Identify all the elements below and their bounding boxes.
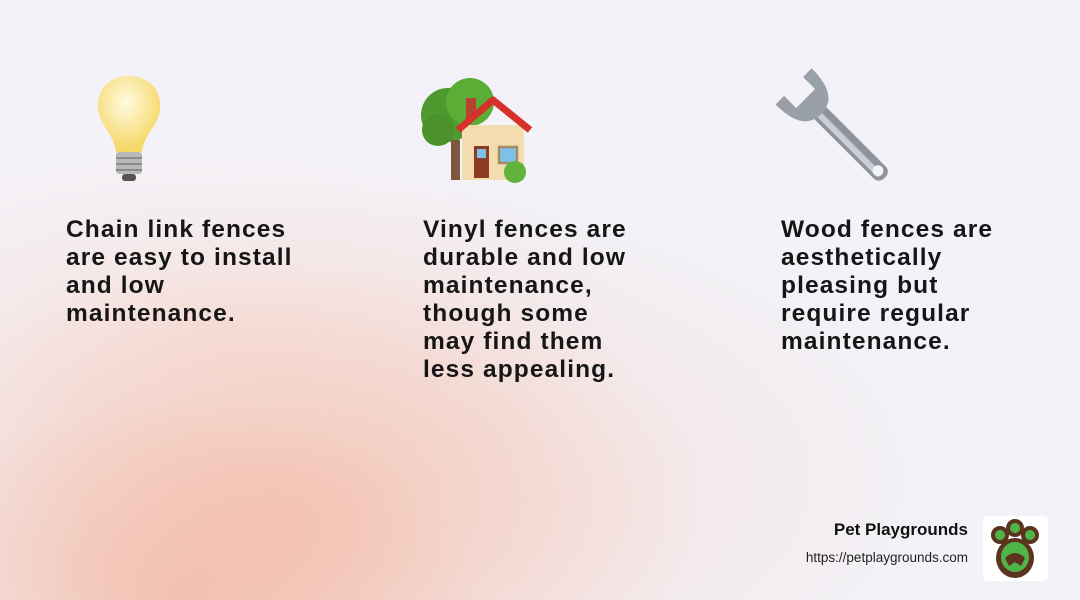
text: wood: require regular xyxy=(781,300,970,327)
text: vinyl: may find them xyxy=(423,328,603,355)
text: wood xyxy=(781,216,993,355)
text: chain link: maintenance. xyxy=(66,300,236,327)
icon: light bulb xyxy=(98,76,160,181)
text: wood: maintenance. xyxy=(781,328,951,355)
icon: wrench xyxy=(776,68,888,181)
text: vinyl: though some xyxy=(423,300,589,327)
logo: paw xyxy=(983,516,1048,581)
text: chain link: and low xyxy=(66,272,165,299)
icon: house with tree xyxy=(421,78,532,183)
text: vinyl: Vinyl fences are xyxy=(423,216,627,243)
text: chain link: Chain link fences xyxy=(66,216,286,243)
text: vinyl xyxy=(423,216,627,383)
text: chain link xyxy=(66,216,293,327)
text: wood: aesthetically xyxy=(781,244,942,271)
text: vinyl: maintenance, xyxy=(423,272,593,299)
text: chain link: are easy to install xyxy=(66,244,293,271)
brand name: Pet Playgrounds xyxy=(834,520,968,539)
brand block xyxy=(806,516,1048,581)
text: wood: pleasing but xyxy=(781,272,938,299)
text: vinyl: durable and low xyxy=(423,244,626,271)
brand url: https://petplaygrounds.com xyxy=(806,550,968,565)
text: vinyl: less appealing. xyxy=(423,356,615,383)
text: wood: Wood fences are xyxy=(781,216,993,243)
